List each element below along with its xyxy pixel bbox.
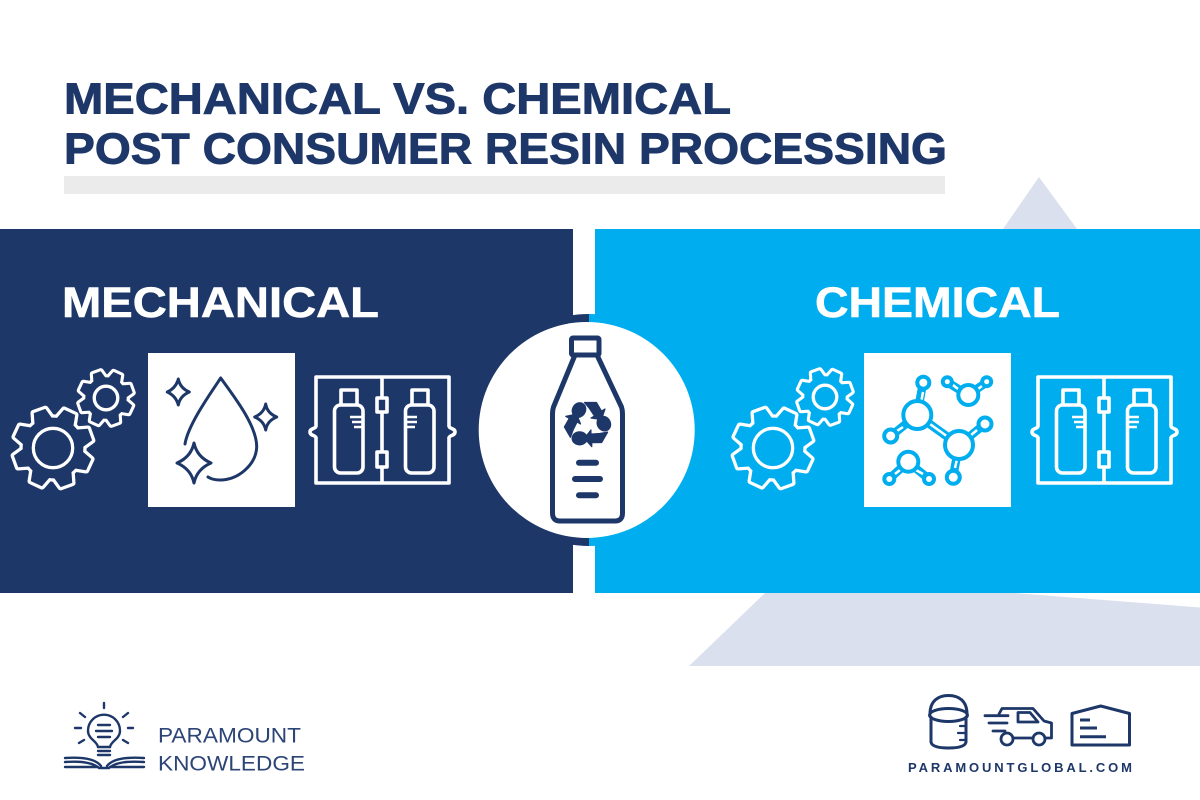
text: paramount knowledge bbox=[158, 724, 305, 776]
icon: bucket bbox=[930, 696, 968, 748]
panel: chemical bbox=[595, 229, 1200, 593]
icon: bottle mold bbox=[1032, 377, 1177, 483]
text: paramount knowledge: KNOWLEDGE bbox=[158, 752, 305, 776]
text: paramount knowledge: PARAMOUNT bbox=[158, 724, 301, 748]
icon: clean water drop bbox=[148, 353, 295, 507]
icon: warehouse bbox=[1072, 706, 1130, 745]
icon: molecules bbox=[864, 353, 1011, 507]
icon: gears bbox=[733, 370, 852, 488]
icon: gears bbox=[13, 371, 133, 488]
title: MECHANICAL VS. CHEMICAL bbox=[64, 74, 731, 124]
panel: mechanical bbox=[0, 229, 573, 593]
text: website: PARAMOUNTGLOBAL.COM bbox=[908, 760, 1132, 775]
center recycled bottle badge bbox=[473, 314, 705, 546]
logo: paramount knowledge bbox=[65, 703, 305, 776]
icon: bottle bbox=[552, 338, 622, 521]
icon: lightbulb and book bbox=[65, 703, 144, 768]
logo: paramount global bbox=[908, 696, 1132, 775]
title bbox=[64, 74, 947, 174]
background triangle shape bbox=[689, 177, 1200, 666]
icon: recycling arrows bbox=[560, 400, 613, 450]
heading: mechanical: MECHANICAL bbox=[62, 279, 379, 327]
heading: chemical: CHEMICAL bbox=[815, 279, 1060, 327]
icon: bottle mold bbox=[310, 377, 455, 483]
bottle label lines bbox=[575, 463, 600, 495]
title: POST CONSUMER RESIN PROCESSING bbox=[64, 124, 947, 174]
icon: delivery van bbox=[985, 708, 1052, 745]
title underline bar bbox=[64, 176, 945, 194]
